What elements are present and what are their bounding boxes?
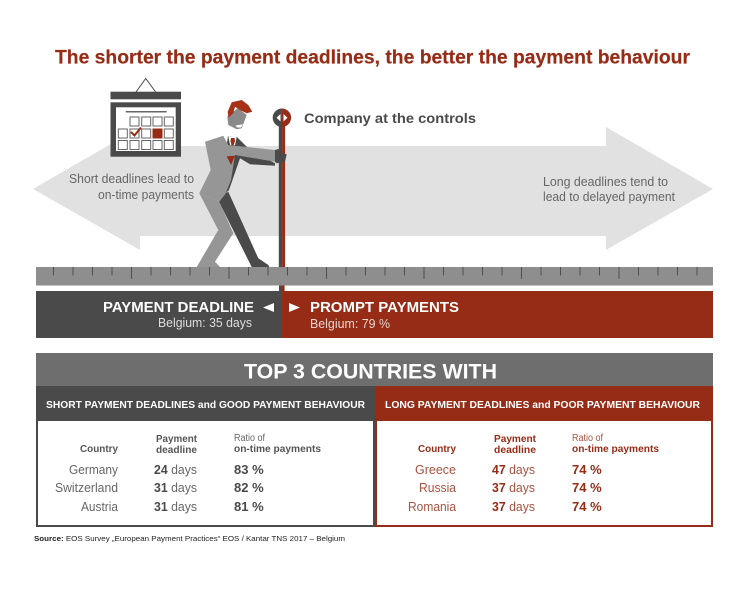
panel: prompt payments xyxy=(282,291,713,338)
panel: short deadlines table: Switzerland xyxy=(55,480,118,495)
panel: short deadlines table: Country xyxy=(80,444,118,455)
text: short deadlines: on-time payments xyxy=(98,188,194,202)
double arrow background xyxy=(33,127,713,250)
smile xyxy=(236,124,243,128)
vest and back arm xyxy=(224,136,275,194)
panel: short deadlines table: Ratio of xyxy=(234,433,265,444)
panel: short deadlines table: Austria xyxy=(81,499,119,514)
panel: short deadlines table: 81 % xyxy=(234,499,264,514)
panel: short deadlines table: 82 % xyxy=(234,480,264,495)
arrow: short deadlines (left) xyxy=(33,127,300,250)
front leg xyxy=(197,193,233,267)
panel: short deadlines table: on-time payments xyxy=(234,444,321,455)
panel: long deadlines table: Ratio of xyxy=(572,433,603,444)
panel: short deadlines table: Germany xyxy=(69,462,118,477)
label: company at the controls: Company at the controls xyxy=(304,110,476,126)
panel: short deadlines table: 24 days xyxy=(154,462,197,477)
head xyxy=(227,108,247,129)
source note: Source: EOS Survey „European Payment Practices“ EOS / Kantar TNS 2017 – Belgium xyxy=(34,534,345,543)
panel: long deadlines table: LONG PAYMENT DEADLINES and POOR PAYMENT BEHAVIOUR xyxy=(385,399,700,411)
heading: top 3 countries xyxy=(36,353,713,386)
text: long deadlines: lead to delayed payment xyxy=(543,190,675,204)
panel: short deadlines table: 31 days xyxy=(154,480,197,495)
text: short deadlines xyxy=(69,172,194,202)
panel: short deadlines table xyxy=(36,386,375,526)
text: long deadlines: Long deadlines tend to xyxy=(543,175,668,189)
panel: long deadlines table: Romania xyxy=(408,499,457,514)
panel: short deadlines table: SHORT PAYMENT DEADLINES and GOOD PAYMENT BEHAVIOUR xyxy=(46,399,365,411)
panel: payment deadline xyxy=(36,291,282,338)
hair xyxy=(228,100,252,118)
control lever xyxy=(273,108,291,292)
arrow: long deadlines (right) xyxy=(280,127,713,250)
icon: wall calendar xyxy=(110,78,181,157)
shirt and tie xyxy=(228,136,237,145)
panel: long deadlines table: 74 % xyxy=(572,499,602,514)
panel: payment deadline: Belgium: 35 days xyxy=(158,316,252,330)
panel: short deadlines table: 83 % xyxy=(234,462,264,477)
back leg xyxy=(219,192,269,267)
panel: short deadlines table: 31 days xyxy=(154,499,197,514)
hand xyxy=(275,149,287,163)
panel: long deadlines table: 74 % xyxy=(572,462,602,477)
text: short deadlines: Short deadlines lead to xyxy=(69,172,194,186)
panel: short deadlines table: deadline xyxy=(156,445,197,456)
panel: short deadlines table: Payment xyxy=(156,434,198,445)
panel: long deadlines table: Payment xyxy=(494,434,537,445)
panel: long deadlines table: 37 days xyxy=(492,499,535,514)
panel: long deadlines table xyxy=(375,386,713,526)
panel: long deadlines table: Country xyxy=(418,444,456,455)
panel: prompt payments: PROMPT PAYMENTS xyxy=(310,299,459,316)
panel: long deadlines table: 37 days xyxy=(492,480,535,495)
text: long deadlines xyxy=(543,175,675,204)
jacket and front arm xyxy=(199,136,275,202)
panel: long deadlines table: Russia xyxy=(419,480,457,495)
panel: long deadlines table: Greece xyxy=(415,462,456,477)
panel: long deadlines table: 74 % xyxy=(572,480,602,495)
ruler xyxy=(36,267,713,286)
title: The shorter the payment deadlines, the better the payment behaviour xyxy=(55,47,691,68)
panel: payment deadline: PAYMENT DEADLINE xyxy=(103,299,254,316)
panel: long deadlines table: on-time payments xyxy=(572,444,659,455)
panel: long deadlines table: 47 days xyxy=(492,462,535,477)
figure: businessman pushing lever xyxy=(197,100,287,267)
panel: prompt payments: Belgium: 79 % xyxy=(310,317,390,331)
panel: long deadlines table: deadline xyxy=(494,445,536,456)
heading: top 3 countries: TOP 3 COUNTRIES WITH xyxy=(244,360,497,384)
